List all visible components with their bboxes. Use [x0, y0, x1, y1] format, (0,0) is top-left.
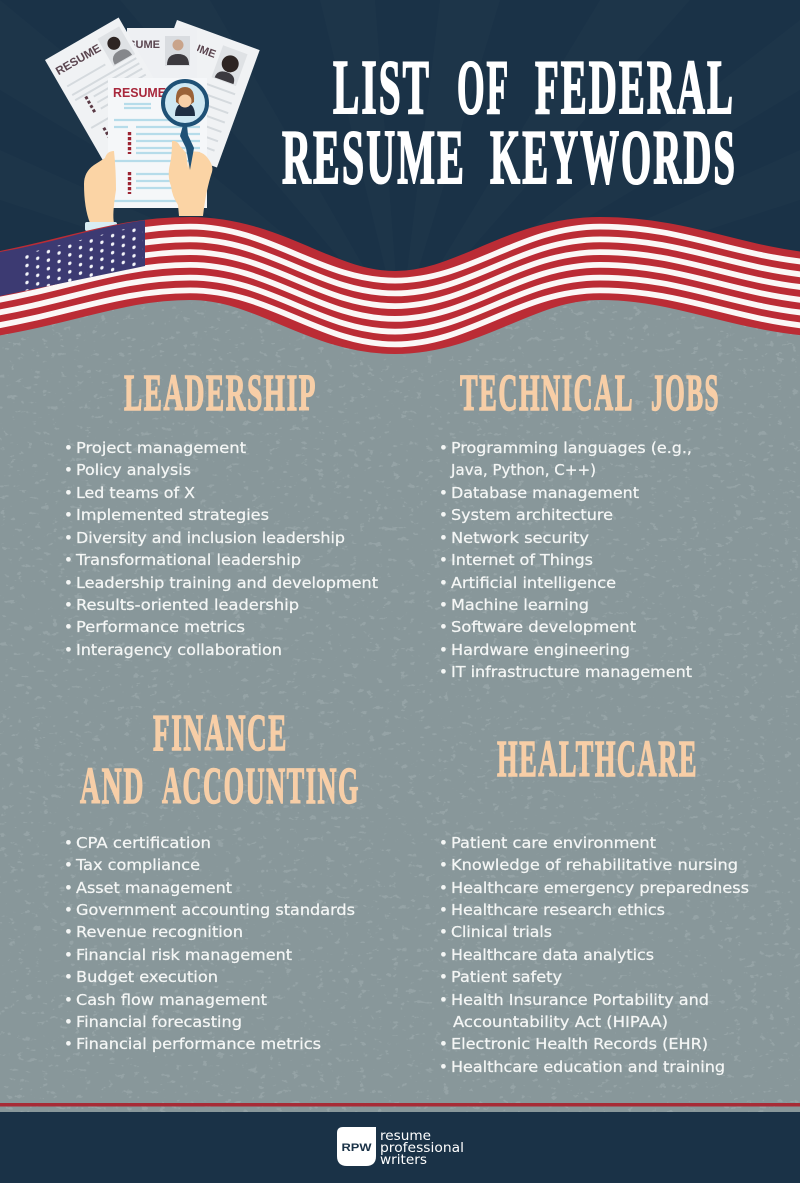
illustration: resumes held in hands [45, 18, 260, 231]
list: healthcare keywords: Patient care environment [451, 834, 656, 852]
panel: technical jobs [439, 365, 720, 681]
list: leadership keywords: • [64, 574, 73, 592]
list: healthcare keywords: • [439, 923, 448, 941]
list: finance keywords: • [64, 834, 73, 852]
list: technical keywords: Artificial intelligence [451, 574, 616, 592]
list: leadership keywords: • [64, 461, 73, 479]
list: technical keywords: • [439, 663, 448, 681]
panel: finance and accounting [64, 705, 360, 1053]
list: technical keywords: • [439, 529, 448, 547]
list: leadership keywords: Leadership training and development [76, 574, 378, 592]
resume sheet: front: RESUME [113, 86, 166, 100]
list: leadership keywords: • [64, 529, 73, 547]
list: leadership keywords: • [64, 551, 73, 569]
list: leadership keywords: Led teams of X [76, 484, 195, 502]
panel: healthcare [439, 731, 749, 1076]
list: finance keywords: Tax compliance [75, 856, 200, 874]
list: healthcare keywords: • [439, 901, 448, 919]
list: technical keywords: • [439, 484, 448, 502]
logo: resume professional writers: writers [380, 1152, 427, 1168]
list: finance keywords: Cash flow management [76, 991, 267, 1009]
list: leadership keywords: • [64, 596, 73, 614]
list: finance keywords: Financial performance metrics [76, 1035, 321, 1053]
title [282, 44, 737, 200]
background rays [0, 0, 800, 330]
list: finance keywords: • [64, 879, 73, 897]
logo: resume professional writers [337, 1127, 464, 1168]
heading: leadership: LEADERSHIP [124, 365, 317, 422]
heading: finance and accounting: AND [80, 758, 145, 815]
footer band [0, 1103, 800, 1183]
list: healthcare keywords: • [439, 834, 448, 852]
list: finance keywords: CPA certification [76, 834, 211, 852]
list: healthcare keywords: Healthcare education and training [451, 1058, 725, 1076]
list: healthcare keywords: • [439, 1058, 448, 1076]
list: technical keywords: Hardware engineering [451, 641, 630, 659]
list: technical keywords: • [439, 618, 448, 636]
list: technical keywords: Software development [451, 618, 636, 636]
list: healthcare keywords: • [439, 1035, 448, 1053]
list: finance keywords: Financial risk management [76, 946, 292, 964]
heading: finance and accounting: FINANCE [153, 705, 288, 762]
heading: technical jobs: TECHNICAL [460, 365, 634, 422]
list: technical keywords: • [439, 641, 448, 659]
list: technical keywords: Internet of Things [451, 551, 593, 569]
list: healthcare keywords [439, 834, 749, 1076]
heading: finance and accounting: ACCOUNTING [162, 758, 360, 815]
icon: left hand [84, 151, 117, 231]
icon: magnifying glass with portrait [163, 81, 207, 170]
title: OF [457, 44, 510, 130]
list: technical keywords: IT infrastructure management [451, 663, 692, 681]
list: finance keywords [64, 834, 355, 1053]
list: finance keywords: • [64, 901, 73, 919]
list: technical keywords: System architecture [451, 506, 613, 524]
list: leadership keywords: • [64, 618, 73, 636]
list: healthcare keywords: • [439, 946, 448, 964]
list: finance keywords: • [64, 946, 73, 964]
list: technical keywords: • [439, 506, 448, 524]
list: finance keywords: • [64, 856, 73, 874]
list: healthcare keywords: Healthcare emergency preparedness [451, 879, 749, 897]
logo: resume professional writers: RPW [342, 1142, 372, 1154]
list: healthcare keywords: Clinical trials [451, 923, 552, 941]
list: leadership keywords: • [64, 641, 73, 659]
list: technical keywords: Machine learning [451, 596, 589, 614]
list: healthcare keywords: Electronic Health Records (EHR) [451, 1035, 708, 1053]
list: healthcare keywords: • [439, 968, 448, 986]
list: healthcare keywords: Knowledge of rehabilitative nursing [451, 856, 738, 874]
list: leadership keywords: • [64, 484, 73, 502]
american flag banner [0, 210, 800, 344]
list: finance keywords: • [64, 923, 73, 941]
icon: right hand [169, 141, 212, 216]
resume sheet: back left: RESUME [54, 42, 104, 78]
list: finance keywords: Budget execution [76, 968, 218, 986]
list: leadership keywords: • [64, 439, 73, 457]
list: finance keywords: Financial forecasting [76, 1013, 242, 1031]
resume sheet: back centre [113, 28, 197, 88]
resume sheet: front [108, 78, 207, 208]
list: healthcare keywords: • [439, 856, 448, 874]
list: leadership keywords: Results-oriented leadership [76, 596, 299, 614]
list: leadership keywords: Diversity and inclusion leadership [76, 529, 345, 547]
list: technical keywords: Java, Python, C++) [450, 461, 596, 479]
background: textured gray panel [0, 280, 800, 1112]
list: finance keywords: • [64, 1035, 73, 1053]
list: healthcare keywords: Health Insurance Portability and [451, 991, 709, 1009]
list: leadership keywords [64, 439, 378, 659]
list: technical keywords: Network security [451, 529, 589, 547]
title: LIST [333, 44, 431, 130]
text: JOBS [651, 365, 720, 422]
panel: leadership [64, 365, 378, 659]
list: leadership keywords: Transformational leadership [75, 551, 301, 569]
list: technical keywords: • [439, 551, 448, 569]
resume sheet: back centre: RESUME [113, 39, 160, 51]
resume sheet: back right: RESUME [169, 33, 217, 61]
flag canton with stars [0, 220, 145, 296]
heading: finance and accounting [80, 705, 360, 815]
list: technical keywords: • [439, 439, 448, 457]
resume sheet: back left [45, 18, 184, 173]
title: RESUME [282, 114, 466, 200]
list: healthcare keywords: • [439, 879, 448, 897]
list: technical keywords [439, 439, 692, 681]
list: technical keywords: • [439, 574, 448, 592]
list: healthcare keywords: Accountability Act (HIPAA) [453, 1013, 668, 1031]
list: finance keywords: Revenue recognition [76, 923, 243, 941]
list: finance keywords: • [64, 991, 73, 1009]
list: leadership keywords: Performance metrics [76, 618, 245, 636]
list: finance keywords: Asset management [76, 879, 232, 897]
list: healthcare keywords: Patient safety [451, 968, 562, 986]
list: leadership keywords: Interagency collaboration [76, 641, 282, 659]
list: healthcare keywords: Healthcare data analytics [451, 946, 654, 964]
list: healthcare keywords: • [439, 991, 448, 1009]
list: leadership keywords: Policy analysis [76, 461, 191, 479]
list: finance keywords: • [64, 1013, 73, 1031]
list: finance keywords: Government accounting standards [76, 901, 355, 919]
logo: resume professional writers: professional [380, 1140, 464, 1156]
list: finance keywords: • [64, 968, 73, 986]
resume sheet: back right [134, 20, 260, 168]
list: technical keywords: • [439, 596, 448, 614]
background: navy header [0, 0, 800, 360]
list: technical keywords: Programming languages (e.g., [451, 439, 692, 457]
list: leadership keywords: Project management [76, 439, 246, 457]
list: leadership keywords: Implemented strategies [76, 506, 269, 524]
list: healthcare keywords: Healthcare research ethics [451, 901, 665, 919]
list: leadership keywords: • [64, 506, 73, 524]
list: technical keywords: Database management [451, 484, 639, 502]
logo: resume professional writers: resume [380, 1128, 431, 1144]
